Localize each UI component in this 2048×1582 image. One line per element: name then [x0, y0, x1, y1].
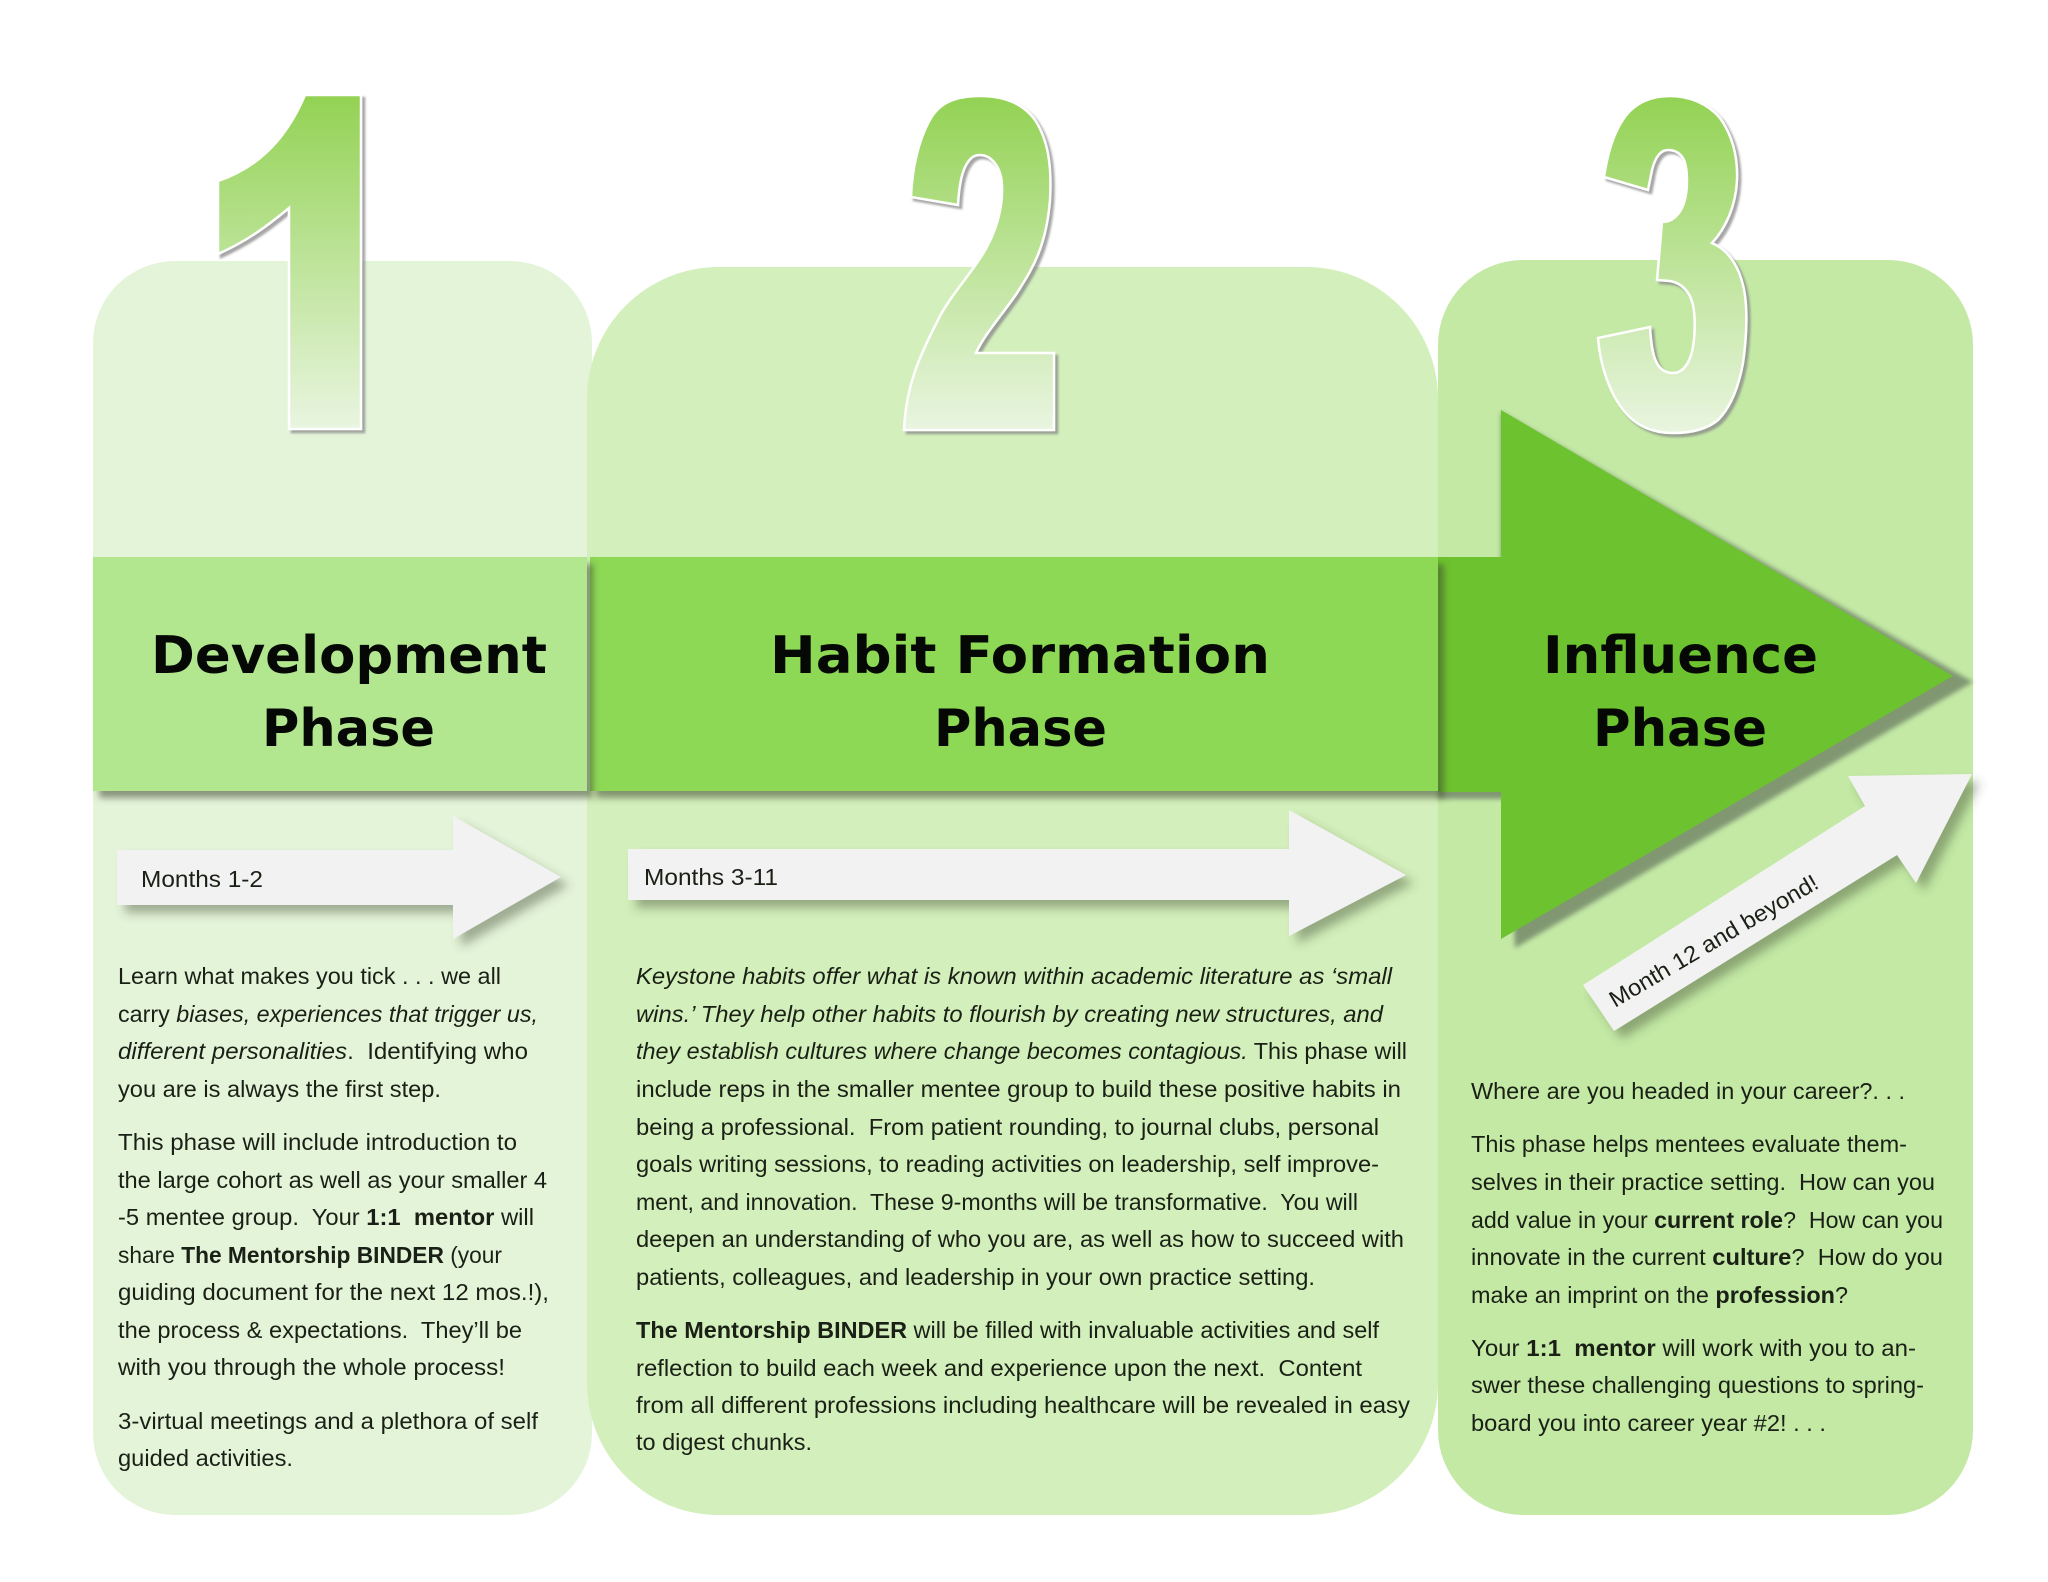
arrow: month 12 and beyond: Month 12 and beyond! — [1604, 869, 1823, 1012]
heading: development phase: Phase — [262, 699, 435, 759]
arrow: months 3-11 — [628, 810, 1406, 936]
text block: habit formation phase: Keystone habits offer what is known within academic literature as ‘small — [636, 963, 1393, 989]
arrow: months 1-2 — [117, 816, 561, 939]
text block: development phase: -5 mentee group. Your 1:1 mentor will — [118, 1204, 534, 1230]
text block: influence phase: board you into career year #2! . . . — [1471, 1410, 1826, 1436]
text block: habit formation phase: deepen an understanding of who you are, as well as how to succeed with — [636, 1226, 1404, 1252]
arrow: months 1-2: Months 1-2 — [141, 866, 263, 892]
text block: development phase: the process & expectations. They’ll be — [118, 1317, 522, 1343]
text block: development phase: the large cohort as well as your smaller 4 — [118, 1167, 547, 1193]
banner: development — [93, 557, 587, 791]
text block: development phase: different personalities . Identifying who — [118, 1038, 528, 1064]
banner arrow: influence — [1438, 410, 1973, 948]
text block: development phase: with you through the whole process! — [117, 1354, 505, 1380]
text block: habit formation phase: being a professional. From patient rounding, to journal clubs, personal — [636, 1114, 1379, 1140]
text block: habit formation phase: reflection to build each week and experience upon the next. Content — [636, 1355, 1363, 1381]
panel: habit formation background — [587, 267, 1438, 1515]
text block: development phase — [117, 963, 549, 1471]
numeral 2 — [904, 96, 1054, 430]
text block: habit formation phase: from all different professions including healthcare will be revealed in easy — [636, 1392, 1411, 1418]
banner: habit formation — [590, 557, 1438, 791]
arrow: month 12 and beyond — [1583, 774, 1972, 1031]
text block: habit formation phase: they establish cultures where change becomes contagious. This phase will — [636, 1038, 1407, 1064]
panel: influence background — [1438, 260, 1973, 1515]
text block: habit formation phase: goals writing sessions, to reading activities on leadership, self improve- — [636, 1151, 1379, 1177]
heading: influence phase: Phase — [1593, 699, 1767, 759]
text block: development phase: Learn what makes you tick . . . we all — [118, 963, 501, 989]
heading: habit formation phase — [770, 626, 1270, 759]
heading: habit formation phase: Habit Formation — [770, 626, 1270, 686]
text block: habit formation phase: include reps in the smaller mentee group to build these positive habits in — [636, 1076, 1401, 1102]
text block: development phase: This phase will include introduction to — [118, 1129, 517, 1155]
text block: habit formation phase: patients, colleagues, and leadership in your own practice setting. — [636, 1264, 1315, 1290]
text block: influence phase: innovate in the current culture? How do you — [1471, 1244, 1943, 1270]
text block: influence phase — [1471, 1078, 1943, 1436]
text block: habit formation phase: to digest chunks. — [636, 1429, 812, 1455]
heading: development phase: Development — [151, 626, 547, 686]
heading: influence phase: Influence — [1543, 626, 1818, 686]
numeral 3 — [1598, 96, 1746, 433]
heading: development phase — [151, 626, 547, 759]
arrow: months 3-11: Months 3-11 — [644, 864, 778, 890]
text block: habit formation phase: wins.’ They help other habits to flourish by creating new structures, and — [636, 1001, 1384, 1027]
text block: development phase: 3-virtual meetings and a plethora of self — [118, 1408, 539, 1434]
text block: influence phase: add value in your current role? How can you — [1471, 1207, 1943, 1233]
text block: habit formation phase: ment, and innovation. These 9-months will be transformative. You will — [636, 1189, 1358, 1215]
numeral 1 — [218, 95, 361, 429]
heading: influence phase — [1543, 626, 1818, 759]
text block: development phase: guided activities. — [118, 1445, 293, 1471]
text block: influence phase: This phase helps mentees evaluate them- — [1471, 1131, 1907, 1157]
text block: development phase: guiding document for the next 12 mos.!), — [118, 1279, 549, 1305]
text block: development phase: share The Mentorship BINDER (your — [118, 1242, 502, 1268]
panel: development background — [93, 261, 592, 1515]
text block: development phase: carry biases, experiences that trigger us, — [118, 1001, 538, 1027]
text block: influence phase: make an imprint on the profession? — [1471, 1282, 1848, 1308]
text block: influence phase: selves in their practice setting. How can you — [1471, 1169, 1935, 1195]
text block: habit formation phase — [636, 963, 1411, 1455]
text block: development phase: you are is always the first step. — [118, 1076, 441, 1102]
heading: habit formation phase: Phase — [934, 699, 1107, 759]
text block: habit formation phase: The Mentorship BINDER will be filled with invaluable activities and self — [636, 1317, 1380, 1343]
text block: influence phase: swer these challenging questions to spring- — [1471, 1372, 1924, 1398]
text block: influence phase: Where are you headed in your career?. . . — [1471, 1078, 1905, 1104]
text block: influence phase: Your 1:1 mentor will work with you to an- — [1471, 1335, 1916, 1361]
